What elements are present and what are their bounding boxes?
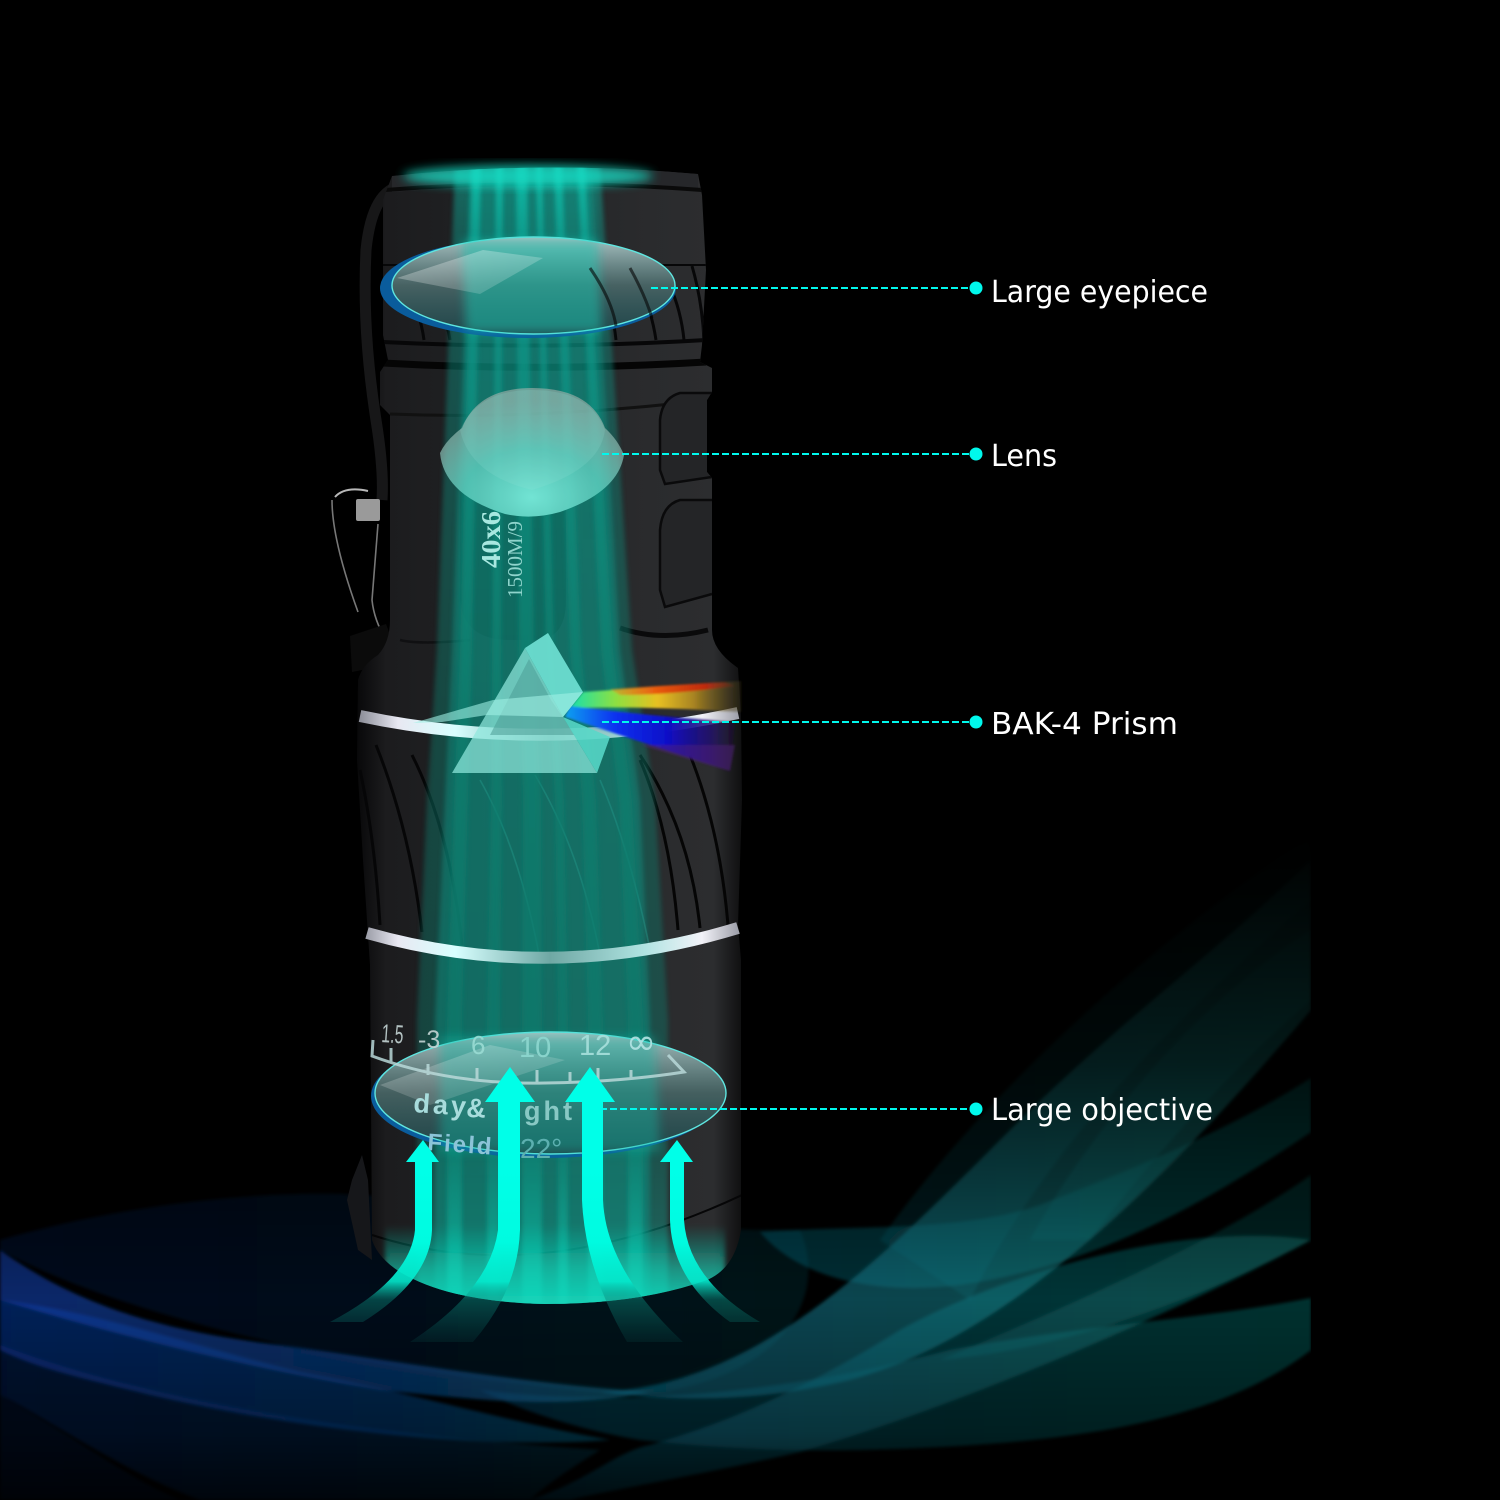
eyepiece window reflection [397, 250, 543, 294]
prism front face [452, 648, 597, 773]
objective beam overlay [440, 1036, 660, 1152]
light beam [385, 165, 725, 1310]
callout: lens: Lens [991, 439, 1057, 474]
focus scale: 6 [471, 1030, 485, 1060]
callout: large eyepiece: Large eyepiece [991, 275, 1208, 310]
large objective lens [371, 1032, 726, 1158]
prism lower side [563, 717, 610, 773]
body text: specifications: 40x6 [476, 511, 506, 568]
arrow centre left [410, 1067, 535, 1342]
lower body faint ridges [480, 775, 650, 960]
body text: specifications: 1500M/9 [503, 521, 527, 598]
BAK-4 prism [413, 633, 741, 773]
objective text: day and night: ght [524, 1096, 575, 1126]
top glow of the beam [403, 165, 653, 187]
large eyepiece lens [380, 237, 676, 338]
callout: large objective: Large objective [991, 1093, 1213, 1128]
monocular body [357, 168, 742, 1304]
specification panel [460, 490, 566, 640]
body text: specifications [476, 511, 527, 598]
objective text: day and night [413, 1088, 575, 1164]
objective text: day and night: & [466, 1093, 486, 1124]
arrow centre right [565, 1067, 683, 1342]
focus scale: 1.5 [381, 1018, 405, 1050]
objective window reflection [380, 1045, 565, 1105]
callout: BAK-4 prism [602, 707, 1178, 742]
prism side face [525, 633, 583, 717]
prism inner shadow [490, 659, 575, 735]
grip recess [400, 393, 712, 642]
callout: large eyepiece [651, 275, 1208, 310]
objective text: day and night: Field [427, 1129, 494, 1161]
flowing light waves [0, 835, 1311, 1500]
eyepiece lens ridges [590, 268, 652, 326]
focus scale: ∞ [626, 1022, 656, 1063]
objective text: day and night: day [413, 1088, 470, 1122]
arrow far left [330, 1140, 439, 1322]
arrow far right [660, 1140, 760, 1322]
eyepiece ribs [383, 265, 707, 415]
callout: large objective [600, 1093, 1213, 1128]
focus scale: 10 [519, 1032, 551, 1064]
eyepiece beam overlay [462, 240, 602, 332]
silver ring upper [360, 713, 738, 735]
focus scale [372, 1018, 684, 1083]
light arrows [330, 1067, 760, 1342]
focus scale: -3 [418, 1026, 440, 1054]
focus scale: 12 [579, 1030, 611, 1062]
neck strap [365, 186, 405, 500]
lower body ribs [360, 745, 742, 1255]
incoming ray [413, 692, 583, 723]
callout: BAK-4 prism: BAK-4 Prism [991, 707, 1178, 742]
lens [440, 388, 624, 517]
callout: lens [602, 439, 1057, 474]
objective text: day and night: 22° [520, 1133, 562, 1164]
eyepiece cap [386, 175, 702, 192]
silver ring lower [367, 928, 738, 958]
side focus knob [347, 1155, 372, 1260]
rainbow light spectrum [565, 681, 741, 771]
strap clip and carabiner [332, 489, 392, 672]
